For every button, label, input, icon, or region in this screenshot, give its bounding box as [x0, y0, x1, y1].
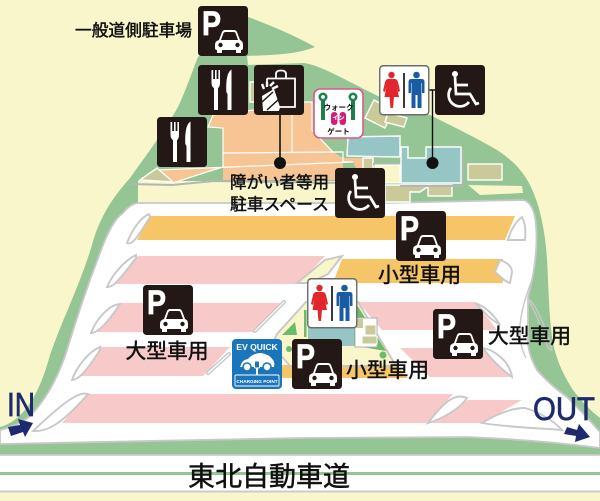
parking stripes: compact cars — [137, 216, 515, 378]
teal buildings — [347, 136, 461, 183]
label: large right: 大型車用 — [488, 325, 571, 348]
expressway — [0, 454, 600, 492]
label: IN: IN — [7, 386, 35, 423]
label: large left: 大型車用 — [126, 340, 208, 363]
icon: EV quick charger: EV QUICK — [236, 342, 279, 352]
icon: toilets lower — [308, 279, 357, 328]
arrow: in — [8, 419, 33, 437]
icon: wheelchair upper — [435, 65, 485, 115]
icon: parking, general road — [198, 5, 248, 56]
arrow: out — [564, 424, 590, 442]
upper island sliver — [297, 256, 342, 283]
icon: restaurant upper — [198, 65, 248, 115]
beige annexes — [140, 82, 502, 202]
label: general road parking: 一般道側駐車場 — [75, 21, 192, 40]
icon: parking, compact lower — [292, 338, 342, 389]
icon: parking, large right — [433, 308, 483, 359]
yellow forecourt under buildings — [138, 181, 380, 204]
icon: walk-in gate: ゲート — [327, 126, 350, 136]
central island — [272, 302, 396, 366]
parking stripes: large vehicles — [62, 256, 522, 423]
icon: walk-in gate: ウォーク — [324, 102, 354, 112]
icon: parking, large left: P — [147, 284, 166, 322]
orange restaurant building — [157, 102, 372, 183]
label: compact upper: 小型車用 — [378, 264, 461, 287]
label: accessible parking — [230, 173, 329, 214]
road islands — [33, 214, 562, 431]
icon: parking, large right: P — [437, 308, 456, 346]
grey building shadow strip — [130, 150, 462, 186]
label: accessible parking: 駐車スペース — [230, 195, 329, 214]
icon: wheelchair parking — [335, 168, 385, 218]
icon: EV quick charger — [232, 339, 282, 389]
road surface — [0, 200, 600, 448]
icon: restaurant lower — [157, 117, 207, 167]
label: Tohoku Expressway: 東北自動車道 — [188, 462, 350, 492]
yellow courtyard — [375, 165, 400, 183]
connector: shop to accessible parking — [274, 115, 286, 169]
label: OUT: OUT — [533, 391, 595, 427]
icon: parking, compact upper — [396, 210, 446, 261]
hill curves — [520, 280, 552, 358]
icon: EV quick charger: CHARGING POINT — [236, 379, 278, 384]
label: accessible parking: 障がい者等用 — [230, 173, 329, 192]
road pill dividers — [208, 302, 284, 373]
icon: parking, compact upper: P — [400, 210, 419, 248]
label: compact lower: 小型車用 — [346, 359, 429, 382]
icon: walk-in gate — [314, 89, 363, 138]
connector: toilets to teal building — [426, 90, 438, 169]
icon: toilets upper — [380, 66, 429, 115]
icon: parking, compact lower: P — [296, 338, 315, 376]
icon: parking, large left — [143, 284, 193, 335]
icon: parking, general road: P — [202, 5, 221, 43]
icon: shop — [254, 65, 304, 115]
service strip — [468, 185, 523, 195]
icon: walk-in gate: イン — [332, 115, 345, 122]
